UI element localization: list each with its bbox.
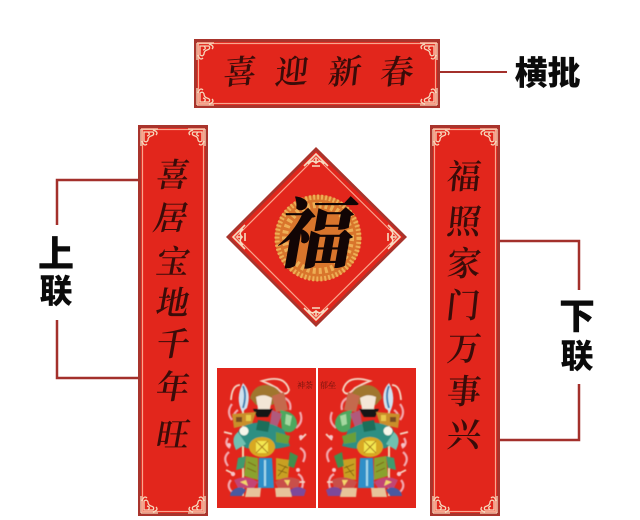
label: 下联 <box>559 296 595 374</box>
right scroll text: 门 <box>444 288 482 325</box>
left scroll text: 千 <box>153 327 193 363</box>
panel: right scroll 下联 <box>430 125 500 516</box>
label: 上联 <box>38 234 74 310</box>
left scroll text: 居 <box>150 201 192 237</box>
label: 上联: 联 <box>40 272 72 310</box>
figure: right door god <box>326 379 408 497</box>
label: 下联: 下 <box>559 296 595 336</box>
left scroll text <box>150 158 193 454</box>
connector: horizontal scroll to label <box>440 71 507 73</box>
horizontal scroll text: 春 <box>378 54 416 92</box>
left scroll text: 喜 <box>153 158 193 194</box>
福 character: 福 <box>272 194 362 278</box>
label: 横批: 横 <box>514 54 548 92</box>
figure: left door god <box>224 379 306 497</box>
right scroll text: 万 <box>445 332 483 368</box>
panel: diamond 福 <box>226 147 407 327</box>
right scroll text: 照 <box>445 205 485 241</box>
label: 横批: 批 <box>548 54 580 92</box>
connector: upper bracket of left label <box>57 180 138 225</box>
golden circle <box>275 195 361 281</box>
panel: left scroll 上联 <box>138 125 208 516</box>
left scroll text: 宝 <box>153 245 193 281</box>
label: 上联: 上 <box>38 234 74 274</box>
horizontal scroll text: 新 <box>326 54 364 92</box>
left scroll text: 年 <box>153 370 193 406</box>
panel: door god left <box>217 368 316 508</box>
small seal text right: 郁垒 <box>320 380 336 390</box>
small seal text left: 神荼 <box>297 380 313 390</box>
left scroll text: 旺 <box>153 418 193 454</box>
left scroll text: 地 <box>153 286 193 322</box>
right scroll text: 事 <box>445 374 483 411</box>
horizontal scroll text: 喜 <box>221 54 259 92</box>
connector: lower bracket of left label <box>57 320 138 378</box>
right scroll text: 家 <box>445 247 483 283</box>
connector: lower bracket of right label <box>499 384 579 440</box>
right scroll text: 福 <box>445 159 483 196</box>
right scroll text <box>444 159 485 454</box>
label: 下联: 联 <box>560 338 594 374</box>
panel: horizontal scroll 横批 <box>194 39 440 108</box>
label: 横批 <box>514 54 580 92</box>
right scroll text: 兴 <box>445 418 485 454</box>
horizontal scroll text: 迎 <box>273 54 311 92</box>
panel: door god right <box>318 368 416 508</box>
horizontal scroll text <box>221 54 416 92</box>
connector: upper bracket of right label <box>499 241 579 290</box>
diamond corner ornaments <box>233 154 400 320</box>
